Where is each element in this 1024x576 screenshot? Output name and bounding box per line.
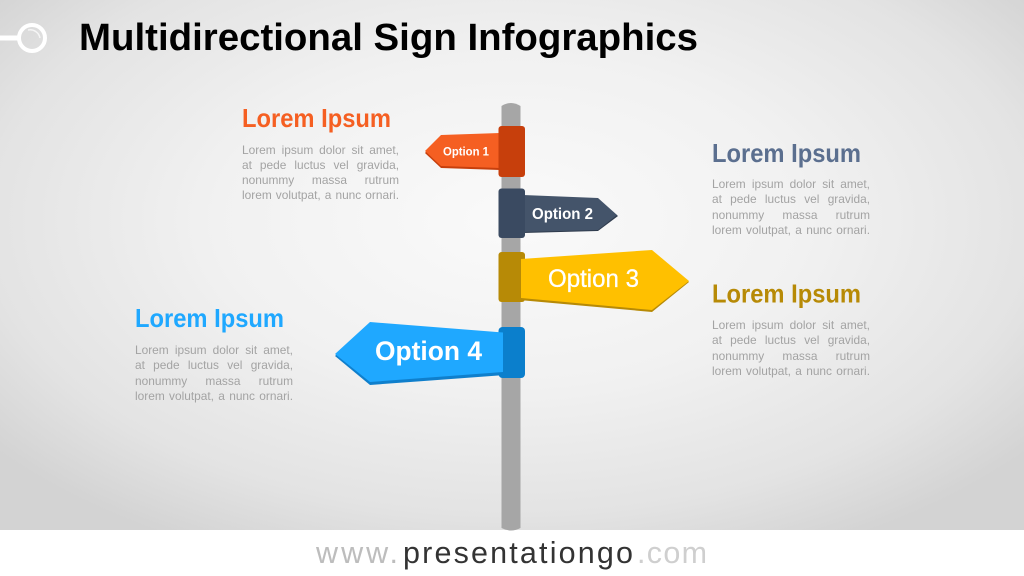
sign: option 2: Option 2 [532,206,593,223]
text block: gold: nonummy massa rutrum [712,349,870,363]
icon: logo ring [0,25,45,51]
heading: navy: Lorem Ipsum [712,138,861,168]
text block: orange: lorem volutpat, a nunc ornari. [242,188,399,202]
sign: option 3 [498,250,689,312]
text block: navy: lorem volutpat, a nunc ornari. [712,223,870,237]
text block: blue: nonummy massa rutrum [135,374,293,388]
text block: blue: Lorem ipsum dolor sit amet, [135,343,293,357]
footer website text: presentationgo [403,536,633,570]
sign: option 4: Option 4 [375,336,482,366]
text block: orange [242,142,399,202]
text block: orange: nonummy massa rutrum [242,173,399,187]
text block: navy: nonummy massa rutrum [712,208,870,222]
text block: blue [135,343,293,403]
text block: blue: lorem volutpat, a nunc ornari. [135,389,293,403]
heading: orange: Lorem Ipsum [242,103,391,133]
heading: gold: Lorem Ipsum [712,278,861,308]
heading: blue: Lorem Ipsum [135,303,284,333]
sign: option 1: Option 1 [443,146,490,158]
text block: gold: lorem volutpat, a nunc ornari. [712,364,870,378]
text block: gold: Lorem ipsum dolor sit amet, [712,318,870,332]
footer website text: www. [315,536,398,570]
text block: orange: Lorem ipsum dolor sit amet, [242,142,399,156]
footer website text: .com [637,536,707,570]
text block: orange: at pede luctus vel gravida, [242,158,399,172]
text block: navy: Lorem ipsum dolor sit amet, [712,177,870,191]
sign: option 2 [498,188,618,238]
footer website text [315,536,707,570]
sign: option 3: Option 3 [548,265,639,293]
text block: navy: at pede luctus vel gravida, [712,192,870,206]
text block: gold: at pede luctus vel gravida, [712,333,870,347]
title: Multidirectional Sign Infographics [79,17,698,59]
sign: option 4 [335,322,525,385]
sign: option 1 [425,126,525,177]
text block: gold [712,318,870,378]
signpost pole [502,103,520,530]
text block: blue: at pede luctus vel gravida, [135,358,293,372]
text block: navy [712,177,870,237]
